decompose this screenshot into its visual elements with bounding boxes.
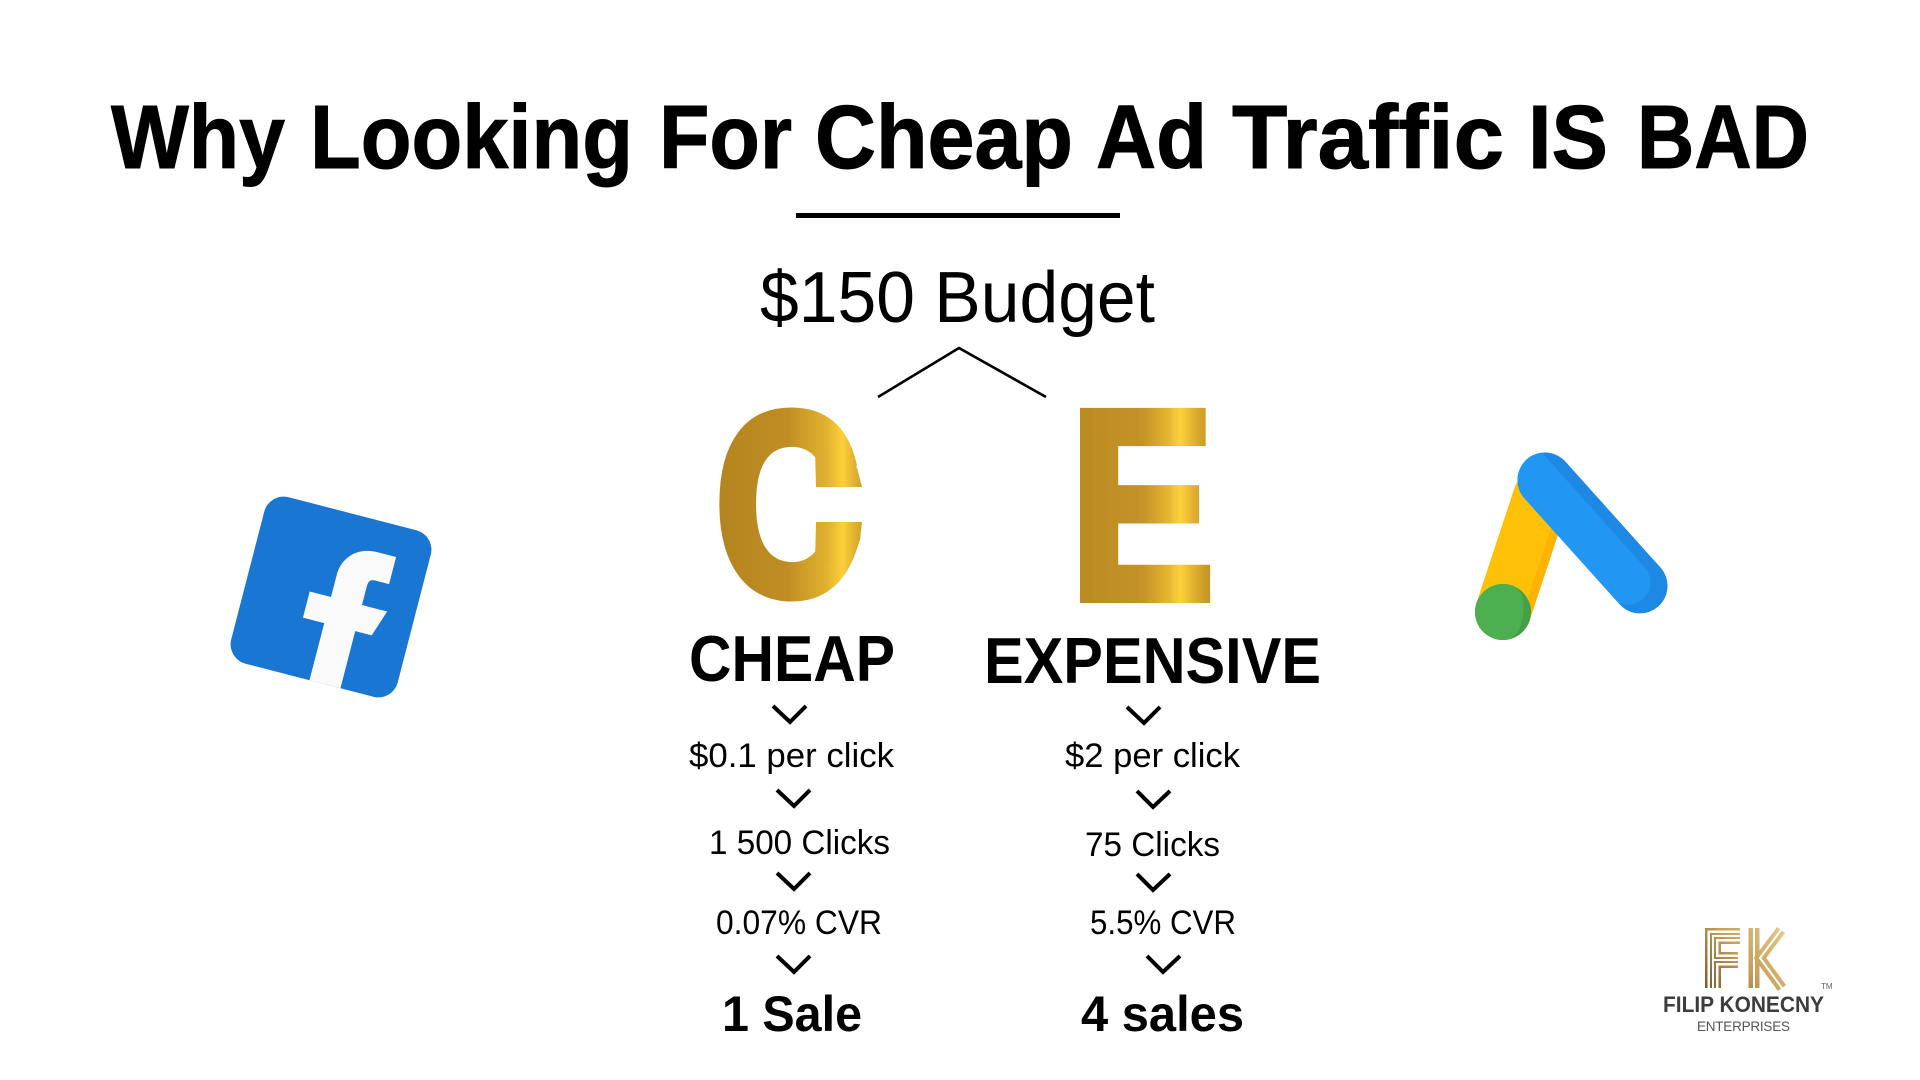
logo: Filip Konecny Enterprises [1663,928,1833,1034]
text: cheap conversion rate: 0.07% CVR [716,904,882,942]
logo name: FILIP KONECNY [1663,992,1824,1017]
arrow: cheap 3 [777,873,810,889]
title: Why [111,88,285,188]
arrow: cheap 4 [777,956,810,972]
logo subtitle: ENTERPRISES [1697,1019,1790,1034]
arrow: budget split into two options [878,348,1046,397]
title: IS [1528,88,1608,188]
arrow: expensive 1 [1127,707,1160,723]
text: expensive clicks: 75 Clicks [1085,826,1220,864]
arrow: cheap 1 [773,706,806,722]
title: For [659,88,792,188]
column heading: cheap: CHEAP [689,622,895,695]
logo mark: FK monogram [1713,928,1782,988]
letter: gold E: E [1068,354,1215,657]
title: Traffic [1232,88,1504,188]
column: cheap flow [689,706,895,1042]
text: expensive conversion rate: 5.5% CVR [1090,904,1236,942]
text: cheap clicks: 1 500 Clicks [709,824,890,862]
letter: gold C: C [715,359,859,649]
arrow: expensive 3 [1137,874,1170,890]
title: BAD [1637,88,1809,188]
text: expensive result: 4 sales [1081,986,1244,1042]
budget label: $150 Budget [760,258,1155,338]
title underline [796,213,1120,218]
title: Looking [310,88,633,188]
icon: Facebook logo [226,492,436,702]
trademark: TM [1821,982,1833,991]
text: cheap result: 1 Sale [722,986,862,1042]
title [111,88,1809,188]
arrow: expensive 2 [1137,791,1170,807]
column: expensive flow [1065,707,1244,1042]
text: cheap cost per click: $0.1 per click [689,737,895,775]
text: expensive cost per click: $2 per click [1065,737,1241,775]
icon: Google Ads logo [1475,452,1668,640]
column heading: expensive: EXPENSIVE [984,624,1321,697]
title: Cheap [815,88,1073,188]
title: Ad [1096,88,1207,188]
arrow: expensive 4 [1147,956,1180,972]
arrow: cheap 2 [777,790,810,806]
